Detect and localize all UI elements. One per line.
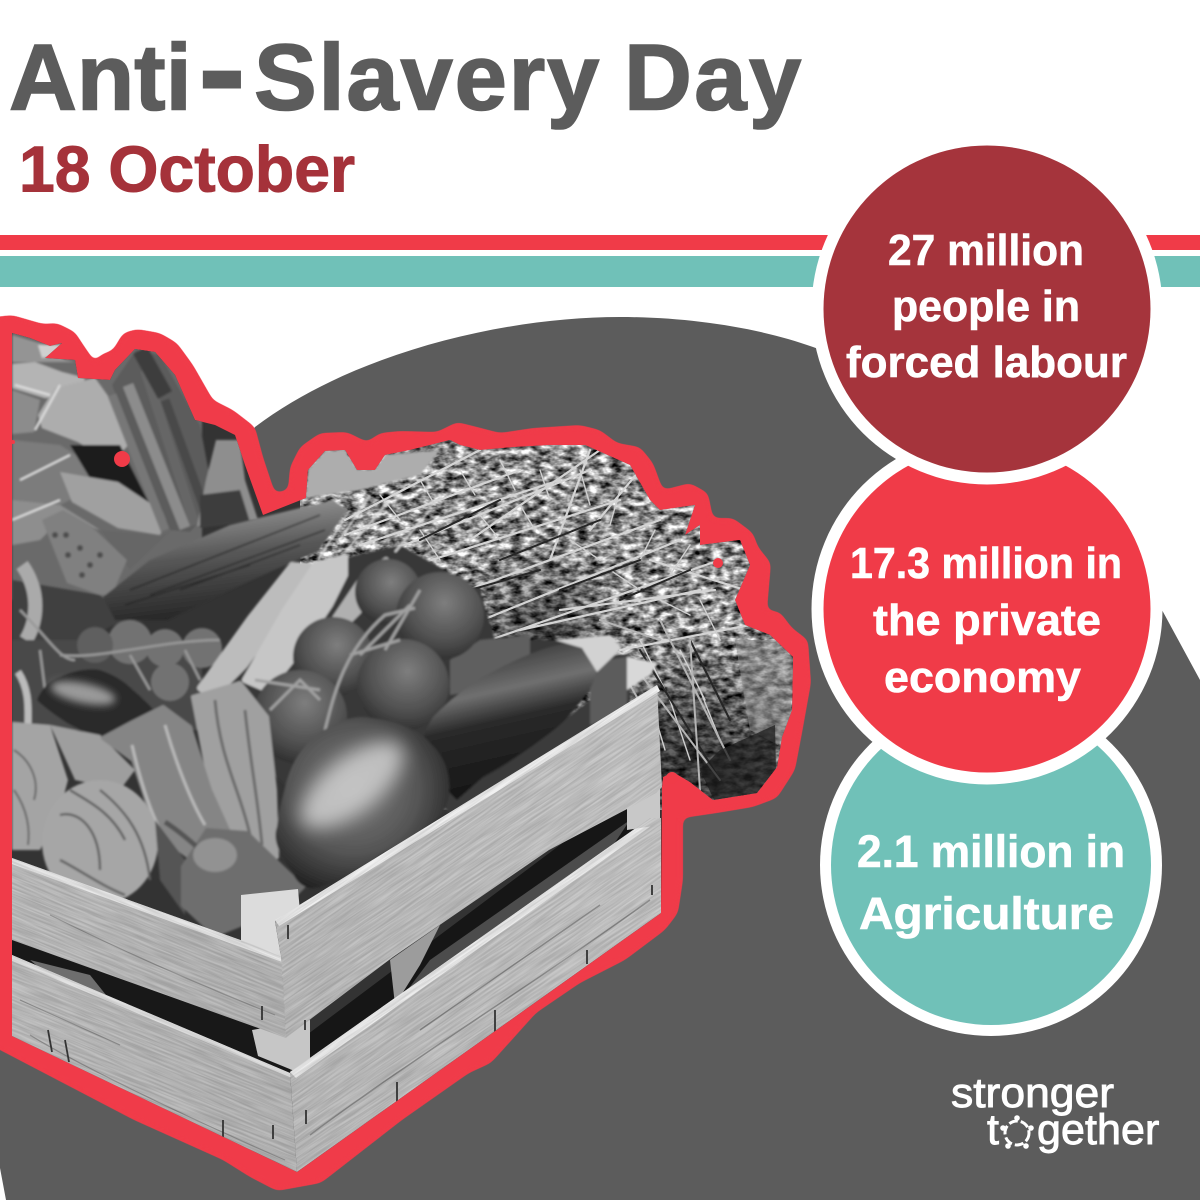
long pepper, left (103, 707, 228, 860)
title: Anti (9, 24, 192, 130)
circle: private economy: economy (884, 653, 1082, 702)
leaves, top left (12, 334, 162, 546)
zucchini (103, 500, 347, 620)
crate: right lower plank (290, 818, 661, 1172)
logo: stronger together: stronger (951, 1069, 1114, 1116)
circle: forced labour: 27 million (888, 226, 1084, 275)
left backing tone (12, 330, 202, 600)
grey background shape (0, 317, 1200, 1200)
lettuce shadow (700, 725, 776, 802)
red cut-out outline (0, 315, 811, 1191)
crate: corner post (241, 889, 300, 957)
tomato vines (255, 590, 420, 730)
title: Slavery (254, 24, 601, 130)
tomatoes (253, 559, 484, 764)
cucumber (42, 510, 127, 595)
crate: left lower plank (12, 955, 297, 1172)
mid tones under zucchini (12, 640, 202, 730)
circle: agriculture: 2.1 million in (857, 826, 1125, 877)
red stripe (0, 235, 1200, 250)
dark gap by artichoke (155, 820, 185, 915)
dark interior behind planks (310, 809, 634, 1058)
carrots (200, 557, 388, 698)
vegetables, lower layer (12, 450, 658, 935)
long pepper, right (193, 683, 277, 857)
circle: agriculture (820, 694, 1162, 1036)
circle: private economy (812, 434, 1162, 784)
crate post tip (627, 657, 658, 690)
bean behind left gap (30, 960, 110, 1000)
logo: stronger together (951, 1069, 1159, 1154)
logo: stronger together: together (987, 1106, 1159, 1154)
dark interior, left gap (12, 935, 290, 1080)
small dark eggplant (37, 669, 157, 740)
cabbage behind right gap (390, 820, 630, 1005)
staples (48, 885, 652, 1144)
crate: left upper plank (12, 858, 286, 1038)
circle: agriculture: Agriculture (859, 888, 1114, 939)
subtitle: date: 18 October (19, 132, 355, 206)
photo: crate of vegetables (0, 320, 820, 1180)
dark backing behind tomatoes (232, 544, 591, 796)
crate: rear upright (627, 780, 660, 830)
dark root area (12, 580, 122, 640)
icon: ring of people (1000, 1115, 1034, 1149)
big bell pepper (275, 717, 449, 888)
eggplant (423, 635, 622, 800)
pale left stem (22, 565, 35, 640)
carrot tops foliage (300, 440, 800, 810)
wood grain, right planks (174, 670, 771, 1172)
circle: private economy: the private (873, 596, 1101, 645)
circle: private economy: 17.3 million in (850, 539, 1122, 588)
vine stems (20, 610, 220, 690)
crate: middle post (252, 1020, 310, 1072)
pale stem left (18, 672, 28, 725)
vegetables (12, 330, 258, 600)
carrot stems (318, 495, 430, 560)
clump beside eggplant (444, 654, 632, 811)
short pepper (165, 822, 303, 935)
circle: forced labour (812, 134, 1162, 484)
wood grain, left planks (0, 848, 370, 1171)
circle: forced labour: forced labour (846, 338, 1127, 387)
stalk shadow (200, 490, 250, 528)
crate: right upper plank (275, 685, 662, 1038)
artichoke, far left (12, 722, 135, 850)
asparagus (112, 350, 215, 532)
cherry tomatoes (77, 620, 222, 701)
pale lettuce behind carrots (306, 450, 440, 498)
stalk vegetable (197, 440, 258, 526)
mid-grey root vegetable (450, 635, 530, 695)
artichoke, centre (42, 780, 158, 904)
lettuce (735, 640, 795, 745)
teal stripe (0, 256, 1200, 287)
bumpy leaf clump (590, 657, 627, 725)
outline holes in foliage (11, 440, 723, 784)
title: Day (624, 24, 804, 130)
circle: forced labour: people in (892, 282, 1080, 331)
